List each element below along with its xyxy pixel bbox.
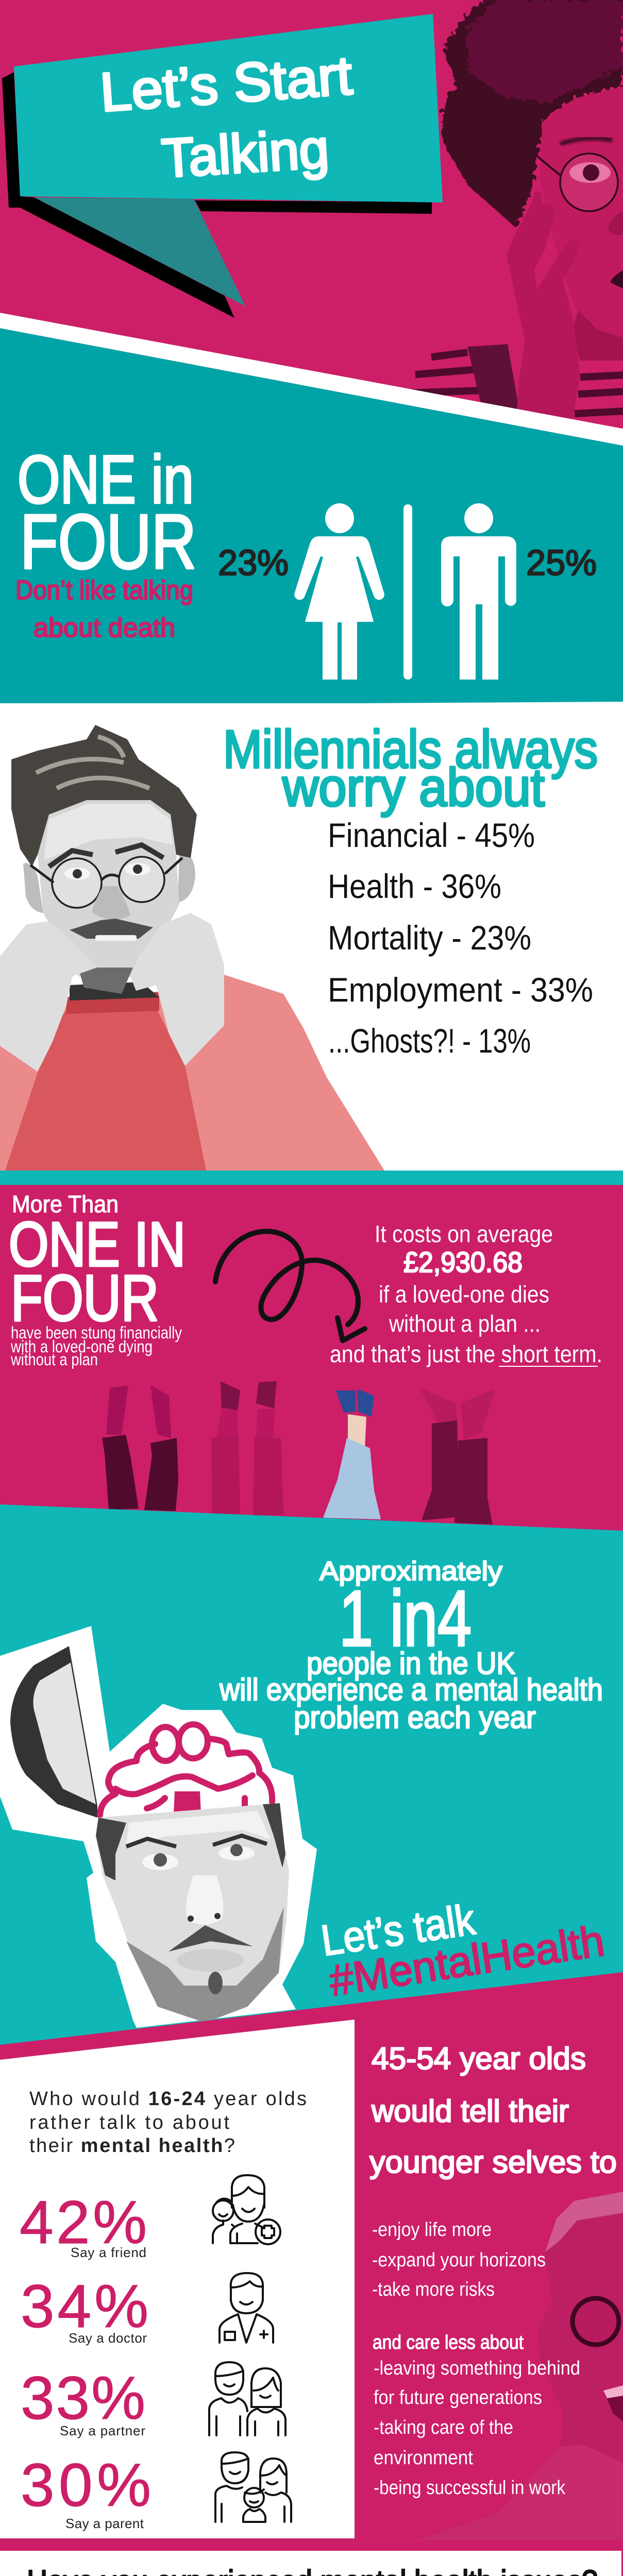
title — [98, 45, 354, 189]
text: approximately 1 in 4: problem each year — [294, 1700, 536, 1735]
panel: financial sting — [0, 1171, 623, 1535]
text: who would 16-24 year olds talk to: their mental health? — [29, 2135, 235, 2157]
text: cost of dying without a plan: if a loved-one dies — [379, 1281, 549, 1308]
text: 45-54 year olds advice: -being successful in work — [374, 2477, 566, 2499]
title: Let’s Start — [98, 45, 354, 123]
text: who would 16-24 year olds talk to: rather talk to about — [29, 2112, 229, 2133]
stat: men 25 percent: 25% — [526, 543, 597, 583]
list: worries: Health - 36% — [328, 867, 501, 905]
icon: man — [441, 503, 516, 680]
text: cost of dying without a plan: without a plan ... — [389, 1310, 541, 1337]
text: more than one in four: More Than — [12, 1191, 119, 1217]
stat: 30 percent parent: Say a parent — [65, 2516, 144, 2531]
list: worries — [328, 816, 593, 1060]
panel: who would they talk to and advice — [0, 1972, 623, 2551]
divider — [403, 504, 412, 680]
stat: 33 percent partner: 33% — [21, 2364, 145, 2432]
text: cost of dying without a plan: £2,930.68 — [403, 1246, 523, 1278]
list: worries: Mortality - 23% — [328, 919, 531, 957]
icon: partner couple — [209, 2362, 285, 2435]
text: 45-54 year olds advice: -expand your horizons — [372, 2249, 546, 2271]
text: 45-54 year olds advice: younger selves to — [369, 2145, 617, 2179]
text: don't like talking about death: Don’t like talking — [15, 575, 193, 605]
text: more than one in four: have been stung financially — [11, 1323, 182, 1342]
text: cost of dying without a plan — [330, 1221, 602, 1367]
stat: 42 percent friend: 42% — [20, 2189, 147, 2257]
speech bubble shadow — [2, 72, 432, 318]
text: 45-54 year olds advice: -take more risks — [372, 2279, 495, 2300]
panel: 1 in 4 mental health — [0, 1504, 623, 2050]
stat: 34 percent doctor: 34% — [21, 2273, 148, 2341]
speech bubble — [14, 14, 443, 306]
stat: 34 percent doctor: Say a doctor — [69, 2330, 147, 2346]
photo: four pairs of raised legs — [102, 1381, 495, 1524]
title: Talking — [160, 118, 331, 189]
stat: women 23 percent: 23% — [218, 543, 289, 583]
heading: one in four — [18, 442, 196, 585]
text: approximately 1 in 4: 1 in4 — [339, 1574, 472, 1663]
heading: millennials always worry about — [223, 720, 598, 818]
text: 45-54 year olds advice: -leaving something behind — [374, 2358, 580, 2379]
text: 45-54 year olds advice — [369, 2041, 617, 2499]
heading: one in four: FOUR — [20, 498, 196, 585]
heading: one in four: ONE in — [18, 442, 194, 517]
icon: doctor — [220, 2273, 273, 2343]
photo: laughing older man — [416, 2192, 623, 2540]
list: worries: ...Ghosts?! - 13% — [328, 1022, 531, 1060]
hashtag: let's talk mental health: #MentalHealth — [326, 1916, 608, 2005]
panel: hero — [0, 0, 623, 464]
text: more than one in four: without a plan — [10, 1350, 98, 1369]
text: 45-54 year olds advice: 45-54 year olds — [372, 2041, 586, 2076]
stat: 30 percent parent: 30% — [21, 2451, 151, 2519]
text: 45-54 year olds advice: and care less about — [373, 2332, 524, 2353]
text: approximately 1 in 4 — [219, 1556, 603, 1735]
text: more than one in four: ONE IN — [9, 1209, 186, 1279]
stat: 42 percent friend: Say a friend — [71, 2245, 146, 2260]
icon: friend — [213, 2175, 280, 2244]
photo: surprised woman with glasses — [399, 0, 623, 443]
text: more than one in four: with a loved-one dying — [10, 1337, 153, 1356]
text: who would 16-24 year olds talk to: Who would 16-24 year olds — [29, 2088, 307, 2110]
panel: have you experienced mental health issues — [0, 2551, 623, 2576]
icon: woman — [294, 503, 384, 680]
panel: 16-24 year olds — [0, 2020, 355, 2538]
arrow: squiggle — [215, 1231, 365, 1341]
hashtag: let's talk mental health: Let’s talk — [318, 1895, 478, 1965]
panel: one in four gender split — [0, 313, 623, 705]
text: more than one in four: FOUR — [11, 1262, 159, 1334]
text: approximately 1 in 4: Approximately — [319, 1556, 502, 1586]
text: 45-54 year olds advice: -taking care of the — [374, 2417, 513, 2438]
text: 45-54 year olds advice: for future generations — [374, 2387, 542, 2409]
text: more than one in four — [9, 1191, 186, 1369]
text: don't like talking about death — [15, 575, 193, 643]
panel: millennials always worry about — [0, 703, 623, 1171]
photo: man with open head and brain — [0, 1626, 317, 2028]
text: who would 16-24 year olds talk to — [29, 2088, 307, 2157]
text: 45-54 year olds advice: -enjoy life more — [372, 2219, 492, 2241]
list: worries: Financial - 45% — [328, 816, 535, 854]
text: don't like talking about death: about death — [33, 613, 175, 643]
heading: millennials always worry about: worry about — [282, 758, 545, 818]
text: 45-54 year olds advice: would tell their — [371, 2094, 569, 2128]
text: cost of dying without a plan: It costs on average — [375, 1221, 553, 1247]
photo: worried man — [0, 725, 384, 1171]
list: worries: Employment - 33% — [328, 971, 593, 1009]
stat: 33 percent partner: Say a partner — [60, 2423, 145, 2438]
icon: parents and child — [215, 2452, 291, 2522]
text: 45-54 year olds advice: environment — [374, 2447, 473, 2469]
text: approximately 1 in 4: people in the UK — [307, 1646, 515, 1681]
